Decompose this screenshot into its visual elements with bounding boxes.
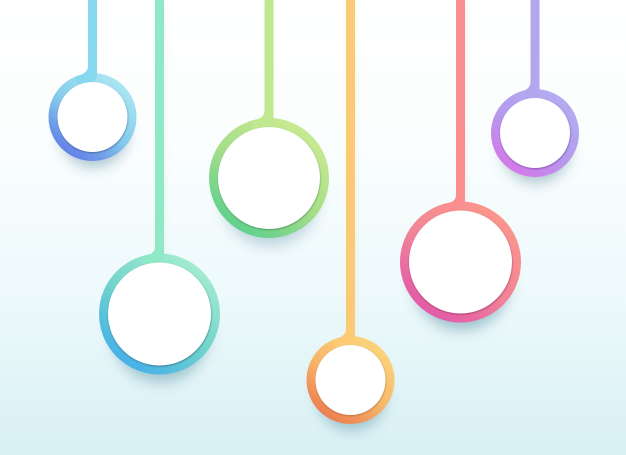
stem 3	[251, 0, 274, 130]
ring 1	[48, 73, 136, 161]
disc 2 shadow	[109, 264, 211, 366]
disc 6 shadow	[501, 99, 570, 169]
ring 3	[209, 118, 329, 238]
disc 1	[58, 82, 128, 152]
ring 4	[306, 336, 394, 424]
ring 1 drop shadow	[60, 99, 128, 167]
node 1: blue small circle	[48, 0, 136, 167]
ring 2	[99, 254, 220, 374]
ring 2 drop shadow	[112, 286, 208, 382]
node 5: pink large circle	[400, 0, 521, 330]
disc 2	[108, 262, 211, 366]
disc 4 shadow	[316, 346, 386, 416]
stem 2 shadow	[158, 0, 166, 255]
stem 5	[442, 0, 465, 214]
ring 6	[491, 89, 579, 177]
ring 4 drop shadow	[318, 362, 386, 430]
ring 3 drop shadow	[222, 150, 318, 246]
node 4: orange small circle	[306, 0, 394, 430]
node 3: green large circle	[209, 0, 329, 246]
disc 3	[218, 127, 320, 229]
disc 1 shadow	[58, 83, 128, 153]
ring 5	[400, 202, 521, 322]
stem 2	[142, 0, 164, 266]
stem 4 shadow	[348, 0, 358, 335]
disc 6	[500, 98, 570, 168]
ring 5 drop shadow	[414, 234, 510, 330]
disc 4	[316, 345, 386, 415]
ring 6 drop shadow	[502, 115, 570, 183]
disc 5 shadow	[410, 212, 512, 314]
node 6: purple small circle	[491, 0, 579, 183]
stem 5 shadow	[458, 0, 468, 205]
disc 3 shadow	[219, 128, 320, 230]
node 2: teal large circle	[99, 0, 220, 382]
stem 6	[517, 0, 540, 100]
stem 4	[332, 0, 355, 348]
stem 1	[74, 0, 97, 84]
disc 5	[409, 210, 512, 314]
